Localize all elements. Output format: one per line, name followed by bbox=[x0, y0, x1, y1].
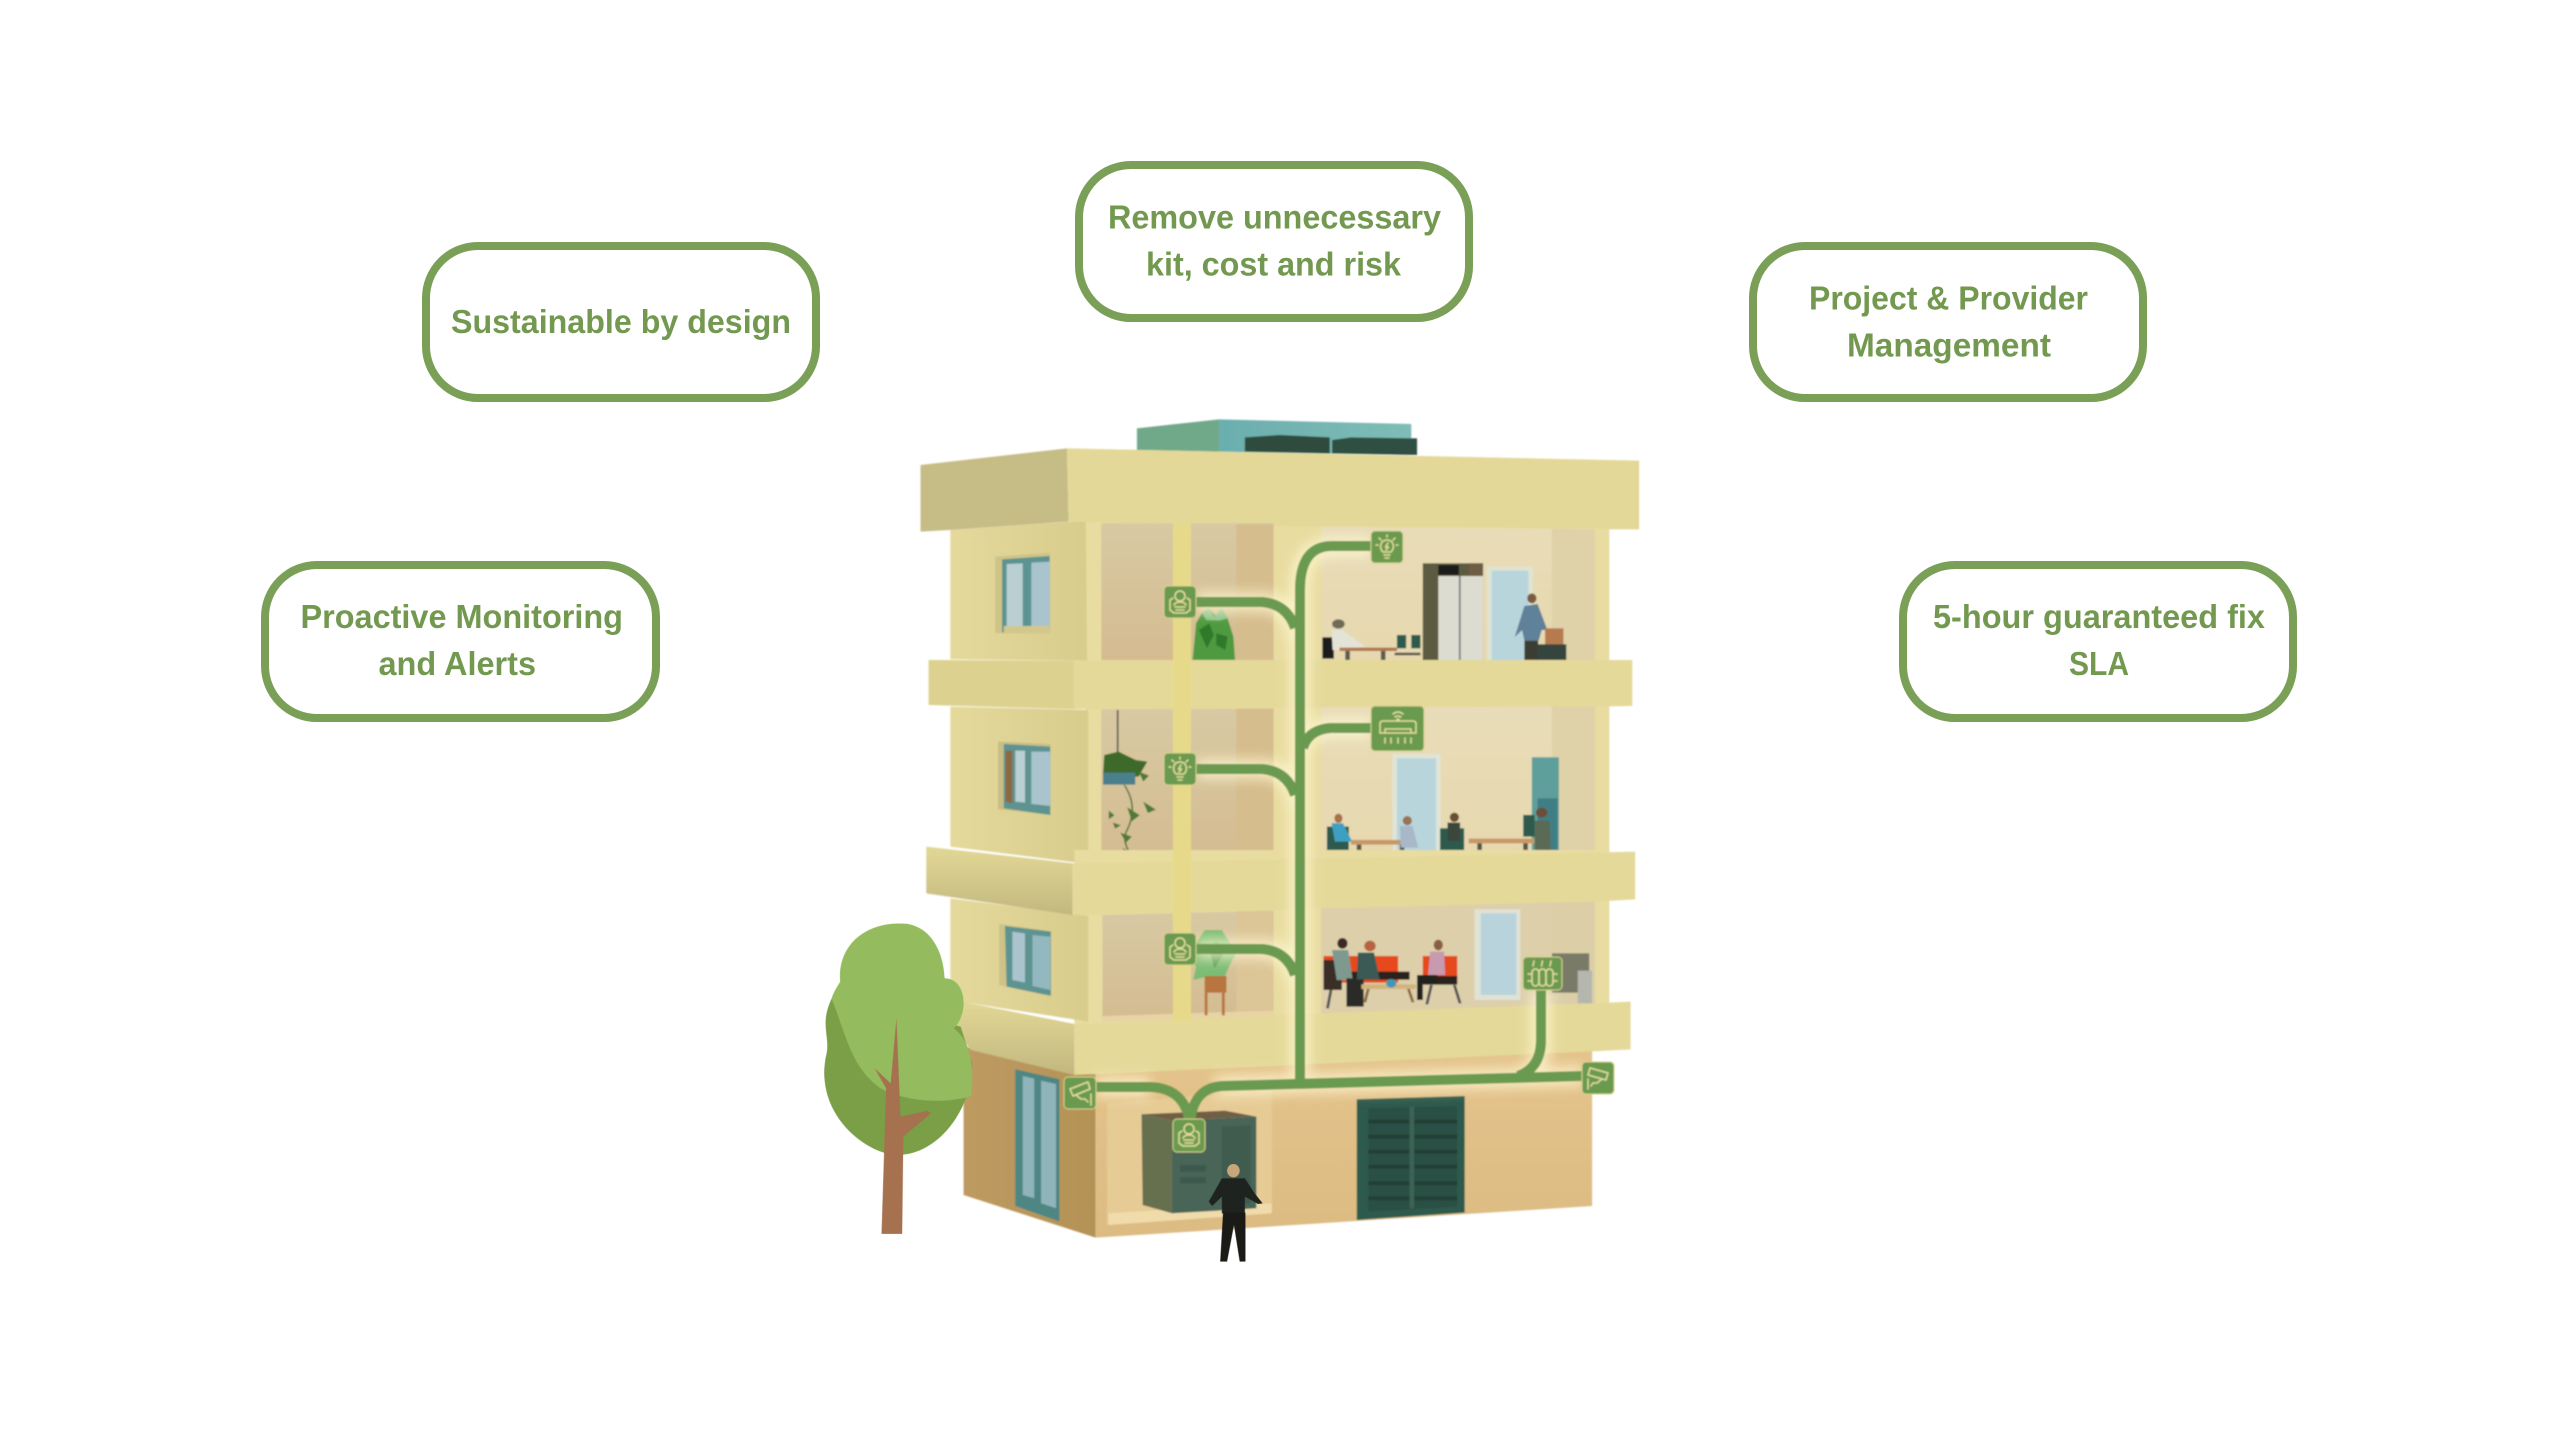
indoor plant bbox=[1193, 608, 1235, 660]
floor 3 left room bbox=[1101, 523, 1274, 660]
callout: Proactive Monitoring and Alerts bbox=[265, 565, 656, 718]
floor 1 left room bbox=[1102, 911, 1274, 1022]
floor 1 window bbox=[999, 924, 1051, 997]
icon: security guard, floor 3 bbox=[1164, 586, 1196, 618]
hanging plant bbox=[1103, 710, 1156, 856]
seated man at desk bbox=[1322, 619, 1420, 660]
icon: smart air conditioner bbox=[1371, 706, 1424, 751]
front wall backing bbox=[1086, 521, 1609, 867]
green louvre door bbox=[1357, 1096, 1465, 1220]
callout: Remove unnecessary kit, cost and risk: kit, cost and risk bbox=[1146, 246, 1402, 282]
floor slab 2nd level bbox=[929, 660, 1632, 709]
icon: security camera, right bbox=[1582, 1062, 1614, 1094]
callout: 5-hour guaranteed fix SLA: 5-hour guaranteed fix bbox=[1933, 598, 2266, 635]
seated people at tables bbox=[1327, 808, 1551, 857]
slab between floors 1 and 2 bbox=[926, 847, 1635, 915]
lounge seating bbox=[1323, 938, 1460, 1008]
icon: light bulb, floor 2 bbox=[1164, 753, 1196, 785]
icon: security guard, floor 1 bbox=[1164, 933, 1196, 965]
pipe glow bbox=[1096, 547, 1583, 1087]
storage cabinet bbox=[1423, 563, 1483, 660]
slab above ground floor bbox=[954, 1000, 1631, 1075]
floor 1 right room bbox=[1321, 902, 1595, 1013]
floor 2 side wall bbox=[950, 707, 1088, 864]
boiler equipment bbox=[1552, 953, 1589, 993]
green network pipes bbox=[1096, 546, 1583, 1125]
callout: Sustainable by design bbox=[426, 246, 816, 398]
riser duct bbox=[1173, 523, 1191, 1022]
callout: Project and Provider Management bbox=[1753, 246, 2143, 398]
callout: Proactive Monitoring and Alerts: and Alerts bbox=[378, 645, 536, 682]
icon: light bulb, top floor bbox=[1371, 531, 1403, 563]
floor 2 right room bbox=[1321, 707, 1595, 858]
door bbox=[1474, 909, 1520, 1000]
icon: radiator bbox=[1523, 957, 1562, 990]
tree bbox=[824, 923, 972, 1234]
callout: Project and Provider Management: Management bbox=[1847, 326, 2051, 364]
office door bbox=[1487, 567, 1533, 660]
floor 2 window bbox=[998, 742, 1050, 815]
icon: security camera, left bbox=[1064, 1077, 1096, 1109]
floor 3 right room bbox=[1321, 527, 1595, 660]
entrance door bbox=[1015, 1069, 1059, 1222]
rooftop plant unit bbox=[1137, 419, 1417, 455]
lower floors bbox=[926, 847, 1635, 1075]
callout: Remove unnecessary kit, cost and risk: Remove unnecessary bbox=[1108, 198, 1442, 236]
building illustration bbox=[921, 419, 1639, 1238]
icon: security guard, cabinet bbox=[1173, 1119, 1205, 1152]
upper floors bbox=[921, 419, 1639, 867]
equipment cabinet bbox=[1142, 1111, 1256, 1213]
roof slab bbox=[921, 448, 1639, 532]
callout: 5-hour guaranteed fix SLA bbox=[1903, 565, 2293, 718]
callout: Sustainable by design: Sustainable by design bbox=[451, 303, 791, 340]
callout: Remove unnecessary kit, cost and risk bbox=[1079, 165, 1469, 318]
floor 2 left room bbox=[1101, 709, 1274, 863]
floor 3 window bbox=[995, 553, 1050, 633]
person standing bbox=[1209, 1164, 1263, 1262]
potted plant bbox=[1187, 930, 1236, 1015]
ground floor bbox=[964, 1047, 1592, 1238]
front wall backing bbox=[1074, 850, 1609, 1027]
callout: Proactive Monitoring and Alerts: Proactive Monitoring bbox=[300, 598, 623, 635]
floor 3 side wall bbox=[950, 521, 1087, 661]
floor 1 side wall bbox=[950, 898, 1088, 1022]
callout: Project and Provider Management: Project & Provider bbox=[1809, 280, 2088, 316]
standing man bbox=[1515, 593, 1566, 660]
callout: 5-hour guaranteed fix SLA: SLA bbox=[2069, 645, 2129, 682]
